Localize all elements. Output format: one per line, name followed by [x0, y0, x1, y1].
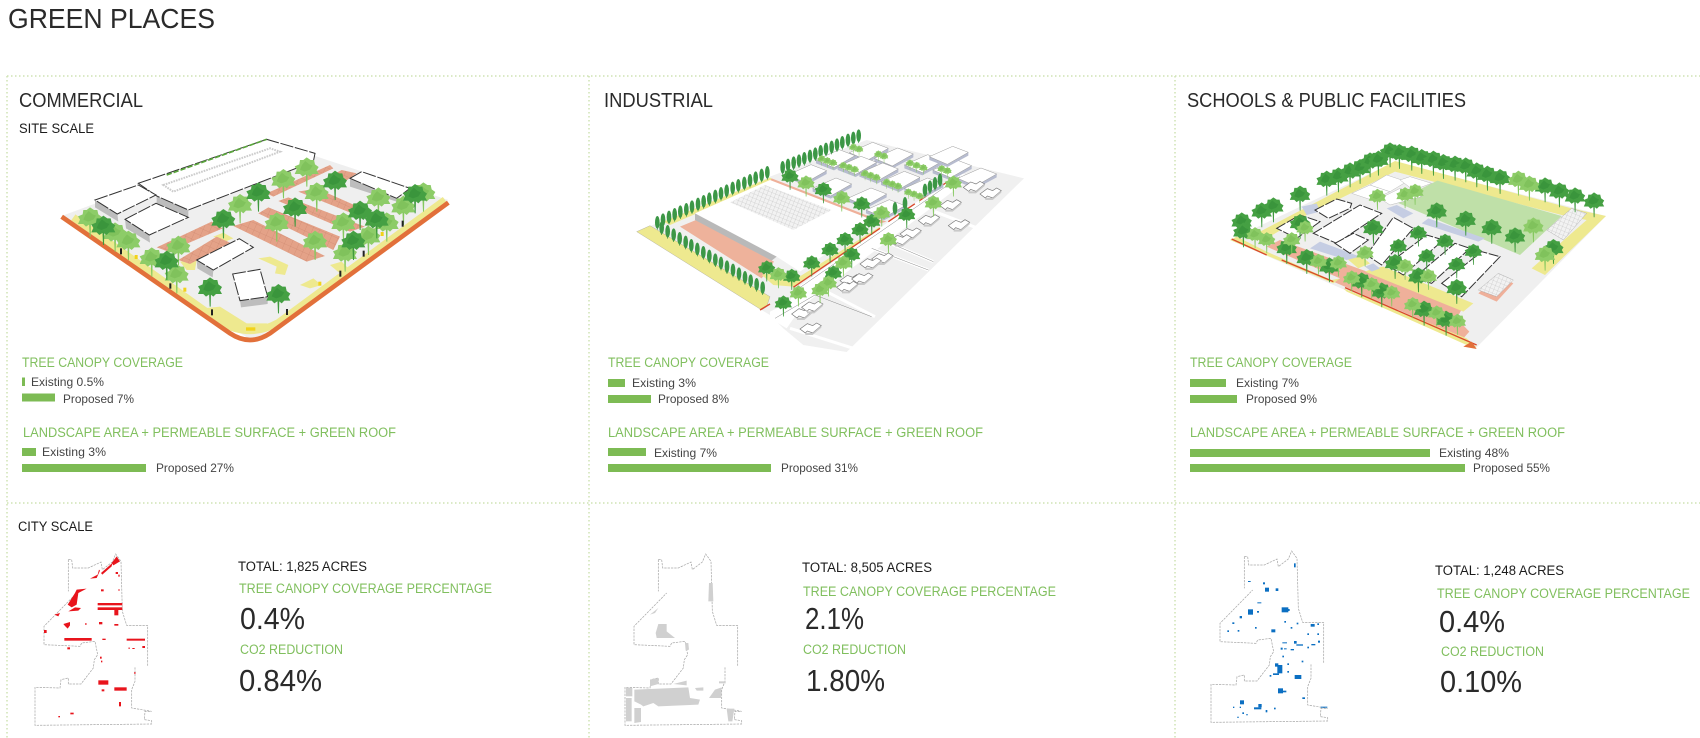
stats: schools city scale: 0.4% — [1439, 604, 1505, 639]
stats: commercial city scale: TREE CANOPY COVERAGE PERCENTAGE — [239, 581, 492, 596]
metrics: commercial tree canopy — [22, 355, 183, 406]
heading: commercial: COMMERCIAL — [19, 90, 143, 112]
metrics: industrial tree canopy: Existing 3% — [632, 376, 696, 390]
panel: schools and public facilities — [1187, 90, 1690, 722]
metrics: schools tree canopy — [1190, 355, 1352, 406]
metrics: industrial landscape area: LANDSCAPE AREA + PERMEABLE SURFACE + GREEN ROOF — [608, 425, 983, 440]
stats: commercial city scale: CO2 REDUCTION — [240, 642, 343, 657]
subheading: site scale: SITE SCALE — [19, 121, 94, 136]
metrics: commercial landscape area: Existing 3% — [42, 445, 106, 459]
metrics: schools tree canopy: Existing 7% — [1236, 376, 1299, 390]
panel: industrial — [604, 90, 1056, 725]
metrics: commercial tree canopy: TREE CANOPY COVERAGE — [22, 355, 183, 370]
title: GREEN PLACES — [8, 3, 215, 34]
stats: schools city scale — [1435, 563, 1690, 699]
metrics: industrial landscape area: Proposed 31% — [781, 461, 858, 475]
metrics: schools landscape area — [1190, 425, 1565, 475]
metrics: commercial landscape area: Proposed 27% — [156, 461, 234, 475]
metrics: schools tree canopy: TREE CANOPY COVERAGE — [1190, 355, 1352, 370]
subheading: city scale: CITY SCALE — [18, 519, 93, 534]
metrics: schools tree canopy: Proposed 9% — [1246, 392, 1317, 406]
map: industrial city scale — [625, 554, 742, 725]
metrics: commercial tree canopy: Existing 0.5% — [31, 375, 104, 389]
stats: commercial city scale: TOTAL: 1,825 ACRES — [238, 559, 367, 574]
stats: industrial city scale: 1.80% — [806, 663, 885, 698]
metrics: schools landscape area: LANDSCAPE AREA + PERMEABLE SURFACE + GREEN ROOF — [1190, 425, 1565, 440]
stats: industrial city scale — [802, 560, 1056, 698]
stats: schools city scale: CO2 REDUCTION — [1441, 644, 1544, 659]
stats: commercial city scale: 0.84% — [239, 663, 322, 698]
stats: schools city scale: 0.10% — [1440, 664, 1522, 699]
metrics: schools landscape area: Proposed 55% — [1473, 461, 1550, 475]
map: commercial city scale — [35, 554, 152, 725]
map: schools city scale — [1211, 551, 1328, 722]
heading: schools and public facilities: SCHOOLS & PUBLIC FACILITIES — [1187, 90, 1466, 112]
stats: industrial city scale: TREE CANOPY COVERAGE PERCENTAGE — [803, 584, 1056, 599]
metrics: industrial landscape area: Existing 7% — [654, 446, 717, 460]
stats: industrial city scale: 2.1% — [805, 601, 864, 636]
metrics: industrial tree canopy: TREE CANOPY COVERAGE — [608, 355, 769, 370]
metrics: schools landscape area: Existing 48% — [1439, 446, 1509, 460]
metrics: commercial tree canopy: Proposed 7% — [63, 392, 134, 406]
metrics: industrial tree canopy: Proposed 8% — [658, 392, 729, 406]
illustration: schools site — [1230, 142, 1606, 349]
metrics: industrial tree canopy — [608, 355, 769, 406]
metrics: industrial landscape area — [608, 425, 983, 475]
illustration: commercial site — [62, 139, 448, 342]
metrics: commercial landscape area — [22, 425, 396, 475]
panel: commercial — [18, 90, 492, 725]
heading: industrial: INDUSTRIAL — [604, 90, 713, 112]
stats: schools city scale: TOTAL: 1,248 ACRES — [1435, 563, 1564, 578]
metrics: commercial landscape area: LANDSCAPE AREA + PERMEABLE SURFACE + GREEN ROOF — [23, 425, 396, 440]
stats: industrial city scale: TOTAL: 8,505 ACRES — [802, 560, 932, 575]
illustration: industrial site — [637, 129, 1024, 352]
stats: commercial city scale — [238, 559, 492, 698]
stats: industrial city scale: CO2 REDUCTION — [803, 642, 906, 657]
stats: commercial city scale: 0.4% — [240, 601, 305, 636]
